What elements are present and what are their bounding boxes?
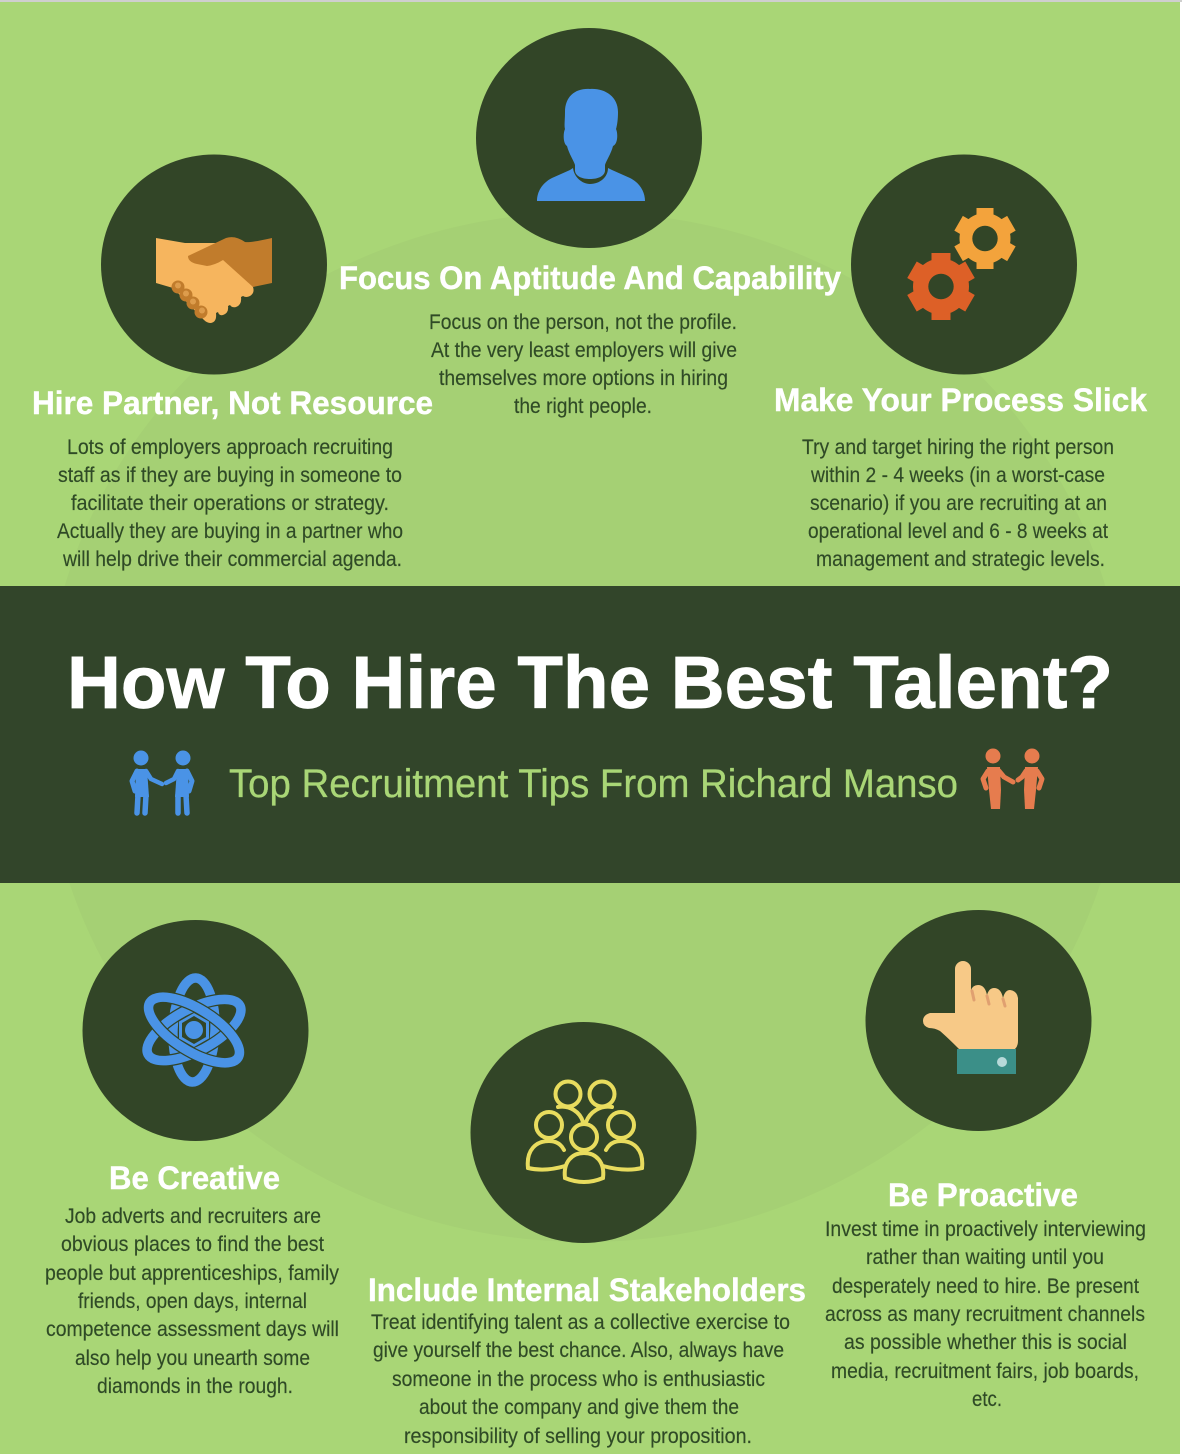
circle: stakeholders: [470, 1022, 696, 1243]
panel: focus on aptitude: [339, 28, 841, 418]
text: partner: [57, 436, 403, 571]
band background: [0, 586, 1180, 883]
text: aptitude: the right people.: [514, 395, 652, 418]
text: creative: also help you unearth some: [75, 1347, 310, 1370]
text: proactive: media, recruitment fairs, job boards,: [831, 1360, 1139, 1383]
text: proactive: as possible whether this is social: [844, 1331, 1127, 1354]
text: partner: staff as if they are buying in someone to: [58, 464, 402, 487]
text: stakeholders: [371, 1311, 790, 1448]
background ellipse: [44, 212, 1126, 1242]
text: stakeholders: responsibility of selling your proposition.: [404, 1425, 752, 1448]
text: stakeholders: Treat identifying talent as a collective exercise to: [371, 1311, 790, 1334]
circle: process: [851, 154, 1077, 374]
title band: [0, 586, 1180, 883]
circle: aptitude: [476, 28, 702, 248]
panel: be creative: [45, 920, 339, 1398]
text: creative: obvious places to find the best: [61, 1233, 324, 1256]
text: aptitude: [429, 311, 737, 418]
text: process: within 2 - 4 weeks (in a worst-case: [810, 464, 1105, 487]
text: creative: [45, 1205, 339, 1398]
title: How To Hire The Best Talent?: [67, 641, 1113, 724]
heading: stakeholders: Include Internal Stakeholders: [368, 1272, 806, 1308]
text: creative: friends, open days, internal: [78, 1290, 307, 1313]
text: proactive: etc.: [972, 1388, 1002, 1411]
text: stakeholders: give yourself the best chance. Also, always have: [373, 1339, 784, 1362]
text: process: [802, 436, 1114, 571]
text: stakeholders: about the company and give them the: [419, 1396, 739, 1419]
icon: atom: [138, 977, 250, 1083]
text: creative: diamonds in the rough.: [97, 1375, 293, 1398]
text: partner: Lots of employers approach recruiting: [67, 436, 393, 459]
circle: creative: [82, 920, 308, 1141]
text: proactive: rather than waiting until you: [866, 1246, 1104, 1269]
heading: aptitude: Focus On Aptitude And Capability: [339, 260, 841, 296]
text: proactive: [825, 1218, 1146, 1411]
text: partner: Actually they are buying in a partner who: [57, 520, 403, 543]
icon: handshake: [156, 237, 272, 323]
text: creative: competence assessment days will: [46, 1318, 339, 1341]
heading: process: Make Your Process Slick: [774, 382, 1147, 418]
circle: proactive: [866, 910, 1092, 1131]
icon: pointing hand: [923, 961, 1018, 1074]
text: process: Try and target hiring the right person: [802, 436, 1114, 459]
heading: creative: Be Creative: [109, 1160, 280, 1196]
text: creative: Job adverts and recruiters are: [65, 1205, 321, 1228]
subtitle: Top Recruitment Tips From Richard Manso: [229, 762, 958, 806]
text: proactive: Invest time in proactively interviewing: [825, 1218, 1146, 1241]
text: aptitude: At the very least employers will give: [431, 339, 737, 362]
text: process: scenario) if you are recruiting at an: [810, 492, 1107, 515]
text: proactive: across as many recruitment channels: [825, 1303, 1145, 1326]
icon: group of people: [528, 1082, 642, 1182]
panel: process slick: [774, 154, 1147, 571]
text: partner: will help drive their commercial agenda.: [62, 548, 402, 571]
text: aptitude: Focus on the person, not the profile.: [429, 311, 737, 334]
text: partner: facilitate their operations or strategy.: [71, 492, 389, 515]
text: proactive: desperately need to hire. Be present: [832, 1275, 1139, 1298]
text: stakeholders: someone in the process who is enthusiastic: [392, 1368, 765, 1391]
heading: proactive: Be Proactive: [888, 1177, 1078, 1213]
icon: orange people: [983, 748, 1042, 809]
circle: partner: [101, 154, 327, 374]
panel: stakeholders: [368, 1022, 806, 1448]
panel: hire partner: [32, 154, 433, 571]
icon: person: [537, 89, 645, 201]
text: process: operational level and 6 - 8 weeks at: [808, 520, 1108, 543]
panel: be proactive: [825, 910, 1146, 1411]
icon: blue people: [132, 750, 192, 813]
icon: gears: [907, 208, 1016, 320]
text: aptitude: themselves more options in hiring: [439, 367, 728, 390]
text: creative: people but apprenticeships, family: [45, 1262, 339, 1285]
heading: partner: Hire Partner, Not Resource: [32, 385, 433, 421]
text: process: management and strategic levels.: [816, 548, 1105, 571]
